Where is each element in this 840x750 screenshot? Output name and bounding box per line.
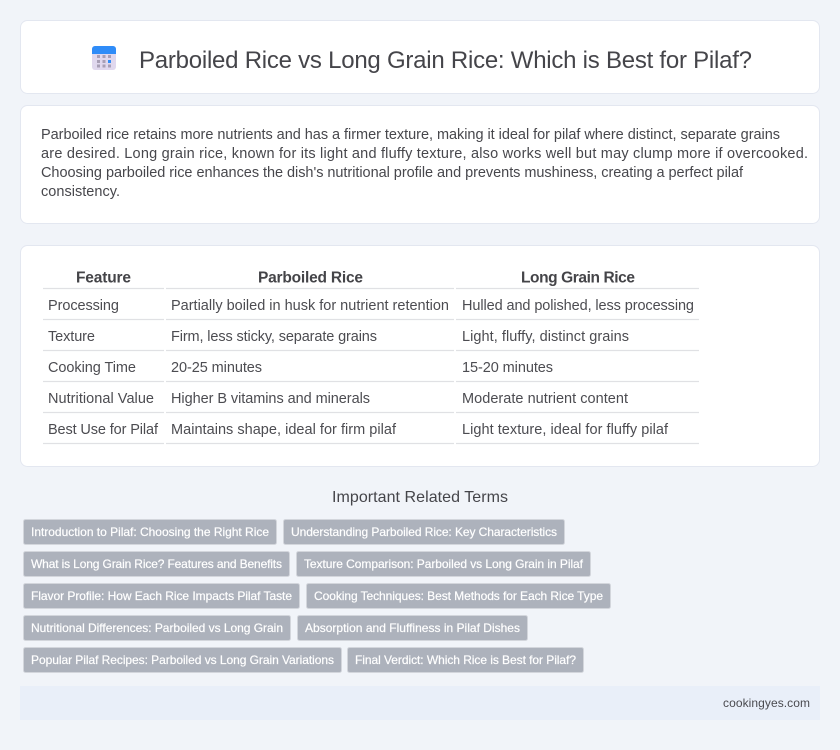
row: nutritional value: Moderate nutrient content	[462, 391, 628, 407]
tag	[24, 616, 290, 640]
icon: calendar	[92, 46, 116, 70]
panel: comparison table	[20, 246, 820, 466]
row: texture: Light, fluffy, distinct grains	[462, 329, 629, 345]
tag: Popular Pilaf Recipes: Parboiled vs Long Grain Variations	[31, 653, 334, 667]
row: texture: Firm, less sticky, separate grains	[171, 329, 377, 345]
tag	[24, 552, 290, 576]
tag: Absorption and Fluffiness in Pilaf Dishes	[305, 621, 520, 635]
row: nutritional value: Nutritional Value	[48, 391, 154, 407]
tag: Nutritional Differences: Parboiled vs Long Grain	[31, 621, 283, 635]
row: processing: Hulled and polished, less processing	[462, 298, 694, 314]
tag	[284, 520, 564, 544]
tag: Cooking Techniques: Best Methods for Each Rice Type	[314, 589, 603, 603]
row: cooking time	[48, 360, 553, 376]
row: nutritional value: Higher B vitamins and minerals	[171, 391, 370, 407]
tag	[24, 584, 300, 608]
tag: Final Verdict: Which Rice is Best for Pilaf?	[355, 653, 576, 667]
row: cooking time: Cooking Time	[48, 360, 136, 376]
table header: Feature	[76, 270, 131, 286]
tag: What is Long Grain Rice? Features and Benefits	[31, 557, 282, 571]
panel: description	[20, 106, 820, 224]
table header: Long Grain Rice	[521, 270, 635, 286]
text block: summary paragraph: consistency.	[41, 184, 120, 200]
row: processing	[48, 298, 694, 314]
related term tags	[24, 520, 610, 672]
footer	[20, 686, 820, 720]
heading: related terms: Important Related Terms	[332, 489, 508, 506]
tag: Understanding Parboiled Rice: Key Characteristics	[291, 525, 557, 539]
row: best use	[48, 422, 669, 438]
tag: Flavor Profile: How Each Rice Impacts Pilaf Taste	[31, 589, 292, 603]
tag	[24, 520, 276, 544]
tag: Introduction to Pilaf: Choosing the Right Rice	[31, 525, 269, 539]
panel: header	[20, 20, 820, 94]
text block: summary paragraph	[41, 127, 808, 200]
tag	[306, 584, 610, 608]
row: best use: Maintains shape, ideal for firm pilaf	[171, 422, 397, 438]
table header	[76, 270, 635, 286]
row: nutritional value	[48, 391, 628, 407]
tag	[24, 648, 342, 672]
row: processing: Partially boiled in husk for nutrient retention	[171, 298, 449, 314]
row: cooking time: 20-25 minutes	[171, 360, 262, 376]
text block: summary paragraph: Parboiled rice retains more nutrients and has a firmer texture, making it ideal for pilaf where distinct, separate grains	[41, 127, 780, 143]
table header: Parboiled Rice	[258, 270, 363, 286]
title: Parboiled Rice vs Long Grain Rice: Which is Best for Pilaf?	[139, 47, 752, 74]
row: texture	[48, 329, 629, 345]
row: best use: Light texture, ideal for fluffy pilaf	[462, 422, 669, 438]
footer source text: cookingyes.com	[723, 696, 810, 710]
tag	[298, 616, 528, 640]
row: texture: Texture	[48, 329, 95, 345]
row: best use: Best Use for Pilaf	[48, 422, 159, 438]
text block: summary paragraph: Choosing parboiled rice enhances the dish's nutritional profile and prevents mushiness, creating a perfect pilaf	[41, 165, 744, 181]
tag	[296, 552, 590, 576]
tag	[348, 648, 584, 672]
row: processing: Processing	[48, 298, 119, 314]
text block: summary paragraph: are desired. Long grain rice, known for its light and fluffy texture, also works well but may clump more if overcooked.	[41, 146, 808, 162]
tag: Texture Comparison: Parboiled vs Long Grain in Pilaf	[304, 557, 584, 571]
row: cooking time: 15-20 minutes	[462, 360, 553, 376]
